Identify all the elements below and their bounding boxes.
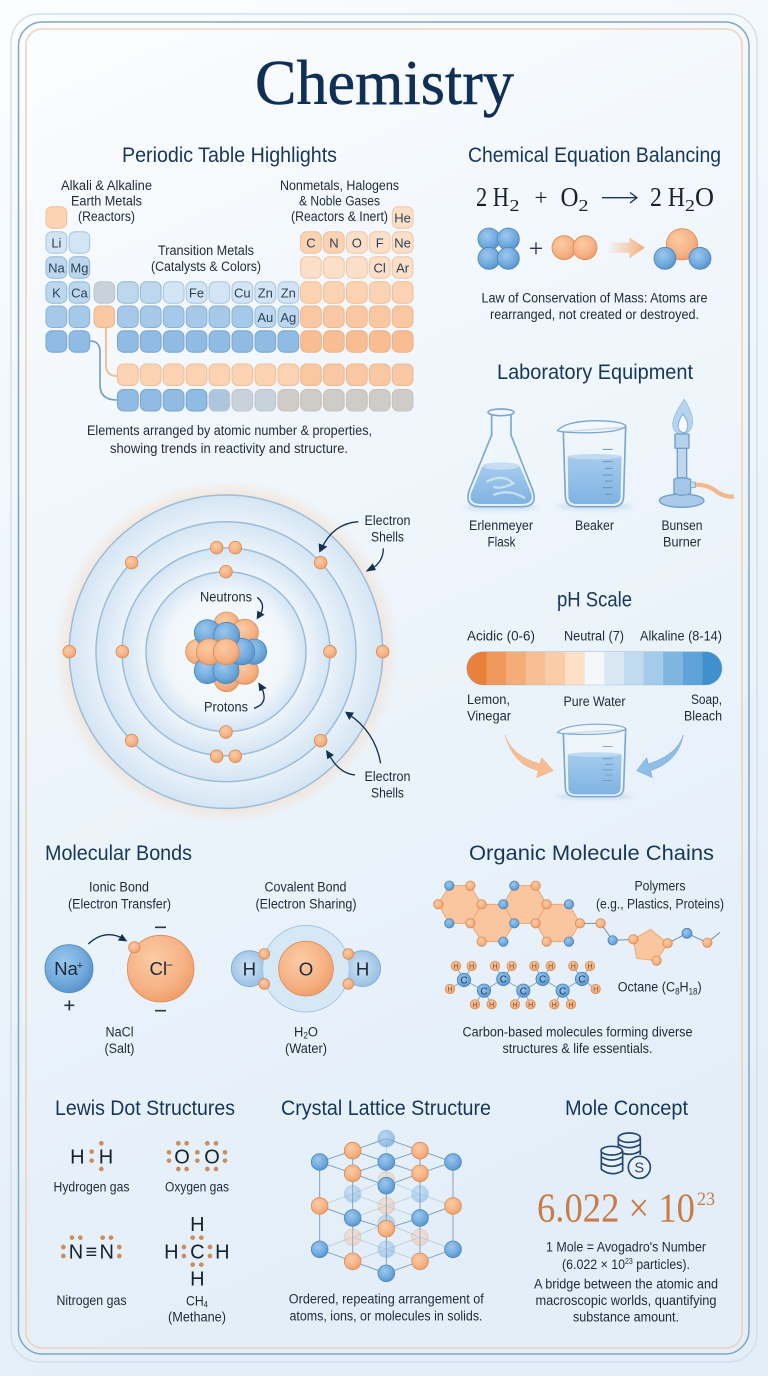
arrow: acid to beaker xyxy=(505,735,553,778)
icon: erlenmeyer flask xyxy=(464,409,538,511)
labels: compounds: H xyxy=(294,1025,304,1041)
diagram: octane molecule: H xyxy=(568,1002,574,1009)
diagram: lewis structures: O xyxy=(174,1146,190,1168)
labels: bond types: Ionic Bond xyxy=(89,880,149,896)
panel: molecular bonds xyxy=(45,841,381,1057)
diagram: octane molecule: H xyxy=(489,1002,494,1009)
label: nonmetals: & Noble Gases xyxy=(299,194,380,210)
label: transition metals xyxy=(151,243,261,275)
labels: atom: Electron xyxy=(364,769,410,785)
caption: conservation of mass: Law of Conservation of Mass: Atoms are xyxy=(482,291,708,307)
labels: equipment: Flask xyxy=(488,535,516,551)
labels: equipment: Burner xyxy=(663,535,701,551)
labels: pH ranges: Acidic (0-6) xyxy=(467,629,535,645)
element symbols: Au xyxy=(257,310,273,325)
diagram: lewis structures: ≡ xyxy=(85,1241,97,1263)
element symbols: Fe xyxy=(189,286,204,300)
diagram: octane molecule: H xyxy=(512,1002,518,1009)
panel: laboratory equipment xyxy=(464,360,734,551)
diagram: octane molecule: H xyxy=(509,964,514,971)
diagram: octane molecule: H xyxy=(469,964,474,971)
diagram: lewis structures: H xyxy=(215,1241,230,1263)
icon: coin stacks xyxy=(601,1133,650,1178)
label: nonmetals xyxy=(280,178,399,225)
labels: equipment: Bunsen xyxy=(662,518,702,534)
caption: crystal lattice: atoms, ions, or molecules in solids. xyxy=(290,1309,482,1325)
diagram: covalent bond: O xyxy=(299,958,313,979)
element symbols: Ar xyxy=(396,260,410,276)
icon: bunsen burner xyxy=(659,399,734,507)
equation: 2 H xyxy=(476,182,509,212)
periodic table grid xyxy=(46,207,413,411)
label: nonmetals: (Reactors & Inert) xyxy=(291,209,388,225)
label: octane: ) xyxy=(697,980,702,996)
diagram: ionic bond: Cl xyxy=(150,958,167,979)
equation: 2 xyxy=(578,196,588,215)
arrow: base to beaker xyxy=(637,735,683,778)
labels: pH examples: Soap, xyxy=(691,692,722,708)
element symbols: Ag xyxy=(280,310,296,325)
diagram: octane molecule: H xyxy=(552,1002,557,1009)
labels: compounds: 2 xyxy=(303,1031,308,1041)
panel: atom diagram xyxy=(54,480,410,824)
diagram: octane molecule: H xyxy=(548,964,553,971)
nucleus xyxy=(186,612,267,692)
labels: pH examples xyxy=(467,692,722,725)
labels: compounds xyxy=(104,1025,327,1057)
reaction molecules xyxy=(478,228,711,269)
caption: conservation of mass: rearranged, not created or destroyed. xyxy=(490,307,699,323)
element symbols: Mg xyxy=(70,260,88,276)
pH color bar xyxy=(467,652,722,685)
label: alkali metals: (Reactors) xyxy=(78,209,135,225)
labels: compounds: O xyxy=(308,1025,318,1041)
caption: periodic table: showing trends in reactivity and structure. xyxy=(110,441,348,457)
equation: 2 xyxy=(510,196,520,215)
diagram: covalent bond xyxy=(231,925,381,1012)
connector lines xyxy=(90,327,117,400)
equation: O xyxy=(560,182,578,212)
diagram: covalent bond: H xyxy=(356,958,369,979)
diagram: covalent bond: H xyxy=(243,958,256,979)
panel: chemical equation balancing xyxy=(468,143,721,323)
labels: compounds: (Water) xyxy=(285,1041,327,1057)
labels: atom xyxy=(200,513,410,801)
diagram: ionic bond: + xyxy=(77,960,84,972)
caption: mole: 1 Mole = Avogadro's Number xyxy=(546,1240,706,1256)
diagram: lewis structures: N xyxy=(69,1241,83,1263)
label: octane: Octane (C xyxy=(618,980,682,996)
diagram: lewis structures: H xyxy=(190,1269,205,1291)
panel: pH scale xyxy=(467,588,722,799)
caption: periodic table xyxy=(87,423,372,457)
panel: periodic table highlights xyxy=(46,143,413,457)
caption: crystal lattice xyxy=(289,1291,484,1325)
label: polymers: Polymers xyxy=(634,879,686,895)
labels: pH examples: Vinegar xyxy=(467,709,511,725)
labels: atom: Neutrons xyxy=(200,590,252,606)
element symbols: He xyxy=(394,210,411,226)
diagram: ionic bond: Na xyxy=(54,958,79,979)
label: alkali metals: Earth Metals xyxy=(71,194,142,210)
labels: lewis xyxy=(54,1180,229,1326)
diagram: lewis structures: H xyxy=(190,1214,205,1236)
labels: lewis: Hydrogen gas xyxy=(54,1180,130,1196)
heading: organic: Organic Molecule Chains xyxy=(469,841,714,865)
avogadro number: 23 xyxy=(697,1189,715,1210)
labels: equipment: Erlenmeyer xyxy=(469,518,533,534)
diagram: octane molecule: H xyxy=(587,964,593,971)
diagram: octane molecule: H xyxy=(453,964,459,971)
equation: O xyxy=(695,182,714,212)
heading: molecular bonds: Molecular Bonds xyxy=(45,841,192,865)
labels: atom: Protons xyxy=(204,700,248,716)
diagram: octane molecule: C xyxy=(578,975,586,986)
labels: equipment: Beaker xyxy=(575,518,614,534)
diagram: octane molecule: H xyxy=(571,964,576,971)
diagram: octane molecule: C xyxy=(460,976,468,987)
label: transition metals: Transition Metals xyxy=(158,243,254,259)
equation: 2 H xyxy=(650,182,685,212)
caption: organic molecules: structures & life essentials. xyxy=(502,1041,652,1057)
caption: mole: 23 xyxy=(625,1257,633,1266)
icon: small beaker xyxy=(557,724,633,799)
labels: pH examples: Lemon, xyxy=(467,692,510,708)
label: octane: H xyxy=(680,980,689,996)
caption: organic molecules: Carbon-based molecules forming diverse xyxy=(462,1025,693,1041)
element symbols: Zn xyxy=(281,286,296,300)
label: polymers xyxy=(596,879,724,913)
labels: lewis: CH xyxy=(186,1294,206,1310)
diagram: lewis structures: N xyxy=(99,1241,114,1263)
panel: lewis dot structures xyxy=(54,1096,235,1326)
icon: beaker xyxy=(557,421,633,510)
heading: lewis: Lewis Dot Structures xyxy=(55,1096,235,1120)
panel: organic molecule chains xyxy=(434,841,724,1057)
caption: mole: macroscopic worlds, quantifying xyxy=(536,1293,716,1309)
diagram: lewis structures: H xyxy=(164,1241,179,1263)
element symbols: K xyxy=(52,286,61,300)
panel: mole concept xyxy=(534,1096,718,1326)
element symbols: Li xyxy=(51,236,62,250)
caption: periodic table: Elements arranged by atomic number & properties, xyxy=(87,423,372,439)
arrows: atom callouts xyxy=(254,522,383,775)
caption: mole: particles). xyxy=(633,1257,690,1273)
heading: equation: Chemical Equation Balancing xyxy=(468,143,721,167)
diagram: octane molecule: H xyxy=(492,964,498,971)
labels: compounds: (Salt) xyxy=(104,1041,134,1057)
diagram: lewis structures: O xyxy=(204,1146,220,1168)
diagram: ionic bond: − xyxy=(166,958,173,972)
element symbols: O xyxy=(352,236,362,250)
diagram: octane molecule: C xyxy=(520,986,527,997)
diagram: octane molecule: C xyxy=(559,986,566,997)
heading: crystal: Crystal Lattice Structure xyxy=(281,1096,491,1120)
equation: 2 xyxy=(685,196,695,215)
labels: lewis: Oxygen gas xyxy=(165,1180,229,1196)
diagram: lewis structures: C xyxy=(190,1241,205,1263)
label: nonmetals: Nonmetals, Halogens xyxy=(280,178,399,194)
heading: periodic table: Periodic Table Highlights xyxy=(122,143,337,167)
label: polymers: (e.g., Plastics, Proteins) xyxy=(596,897,724,913)
labels: pH ranges: Alkaline (8-14) xyxy=(640,629,722,645)
element symbols xyxy=(48,210,411,325)
element symbols: Ne xyxy=(394,236,411,250)
heading: laboratory: Laboratory Equipment xyxy=(497,360,693,384)
heading: mole: Mole Concept xyxy=(565,1096,688,1120)
diagram: octane molecule: C xyxy=(500,975,507,986)
labels: lewis: Nitrogen gas xyxy=(56,1293,126,1309)
labels: pH examples: Bleach xyxy=(684,709,722,725)
diagram: ionic bond xyxy=(45,927,194,1011)
labels: atom: Shells xyxy=(371,530,404,546)
caption: mole: (6.022 × 10 xyxy=(562,1257,634,1273)
element symbols: F xyxy=(376,236,384,250)
diagram: octane molecule: H xyxy=(593,987,598,994)
avogadro number: 6.022 × 10 xyxy=(537,1185,695,1231)
diagram: polymer chain xyxy=(434,881,720,965)
element symbols: Cl xyxy=(374,260,386,276)
label: alkali metals xyxy=(61,178,152,225)
icon: coin stacks: S xyxy=(634,1161,644,1177)
label: octane: 18 xyxy=(689,987,697,997)
diagram: octane molecule: H xyxy=(528,1002,533,1009)
caption: crystal lattice: Ordered, repeating arrangement of xyxy=(289,1291,484,1307)
heading: pH scale: pH Scale xyxy=(557,588,632,612)
diagram: octane molecule xyxy=(445,961,600,1009)
caption: organic molecules xyxy=(462,1025,693,1057)
equation: + xyxy=(535,185,547,210)
atom shells xyxy=(54,480,398,824)
labels: pH ranges xyxy=(467,629,722,645)
diagram: octane molecule: H xyxy=(532,964,537,971)
diagram: octane molecule: H xyxy=(472,1002,478,1009)
panel: crystal lattice xyxy=(281,1096,491,1325)
labels: compounds: NaCl xyxy=(106,1025,134,1041)
label: transition metals: (Catalysts & Colors) xyxy=(151,259,261,275)
labels: atom: Shells xyxy=(371,785,404,801)
labels: bond types: (Electron Sharing) xyxy=(256,897,356,913)
element symbols: Na xyxy=(48,260,65,276)
diagram: octane molecule: C xyxy=(480,986,488,997)
labels: equipment xyxy=(469,518,702,551)
diagram: lewis structures xyxy=(61,1141,230,1291)
diagram: crystal lattice xyxy=(311,1130,461,1282)
labels: pH examples: Pure Water xyxy=(564,694,626,710)
caption: conservation of mass xyxy=(482,291,708,323)
labels: bond types xyxy=(68,880,356,913)
diagram: octane molecule: H xyxy=(447,987,453,994)
element symbols: Ca xyxy=(71,286,88,300)
element symbols: N xyxy=(329,236,339,250)
label: alkali metals: Alkali & Alkaline xyxy=(61,178,152,194)
element symbols: Zn xyxy=(258,286,273,300)
diagram: lewis structures: H xyxy=(70,1146,85,1168)
labels: lewis: (Methane) xyxy=(168,1310,226,1326)
diagram: octane molecule: C xyxy=(539,975,546,986)
title: Chemistry xyxy=(255,47,514,118)
caption: mole: substance amount. xyxy=(573,1310,679,1326)
caption: mole: A bridge between the atomic and xyxy=(534,1276,718,1292)
labels: bond types: (Electron Transfer) xyxy=(68,897,171,913)
label: octane: 8 xyxy=(675,987,680,997)
labels: pH ranges: Neutral (7) xyxy=(564,629,624,645)
labels: bond types: Covalent Bond xyxy=(264,880,346,896)
diagram: lewis structures: H xyxy=(99,1146,113,1168)
labels: lewis: 4 xyxy=(204,1300,208,1310)
element symbols: C xyxy=(306,236,316,250)
electrons xyxy=(63,541,389,763)
caption: mole xyxy=(534,1240,718,1326)
labels: atom: Electron xyxy=(364,513,410,529)
equation xyxy=(476,182,714,215)
element symbols: Cu xyxy=(234,286,251,300)
